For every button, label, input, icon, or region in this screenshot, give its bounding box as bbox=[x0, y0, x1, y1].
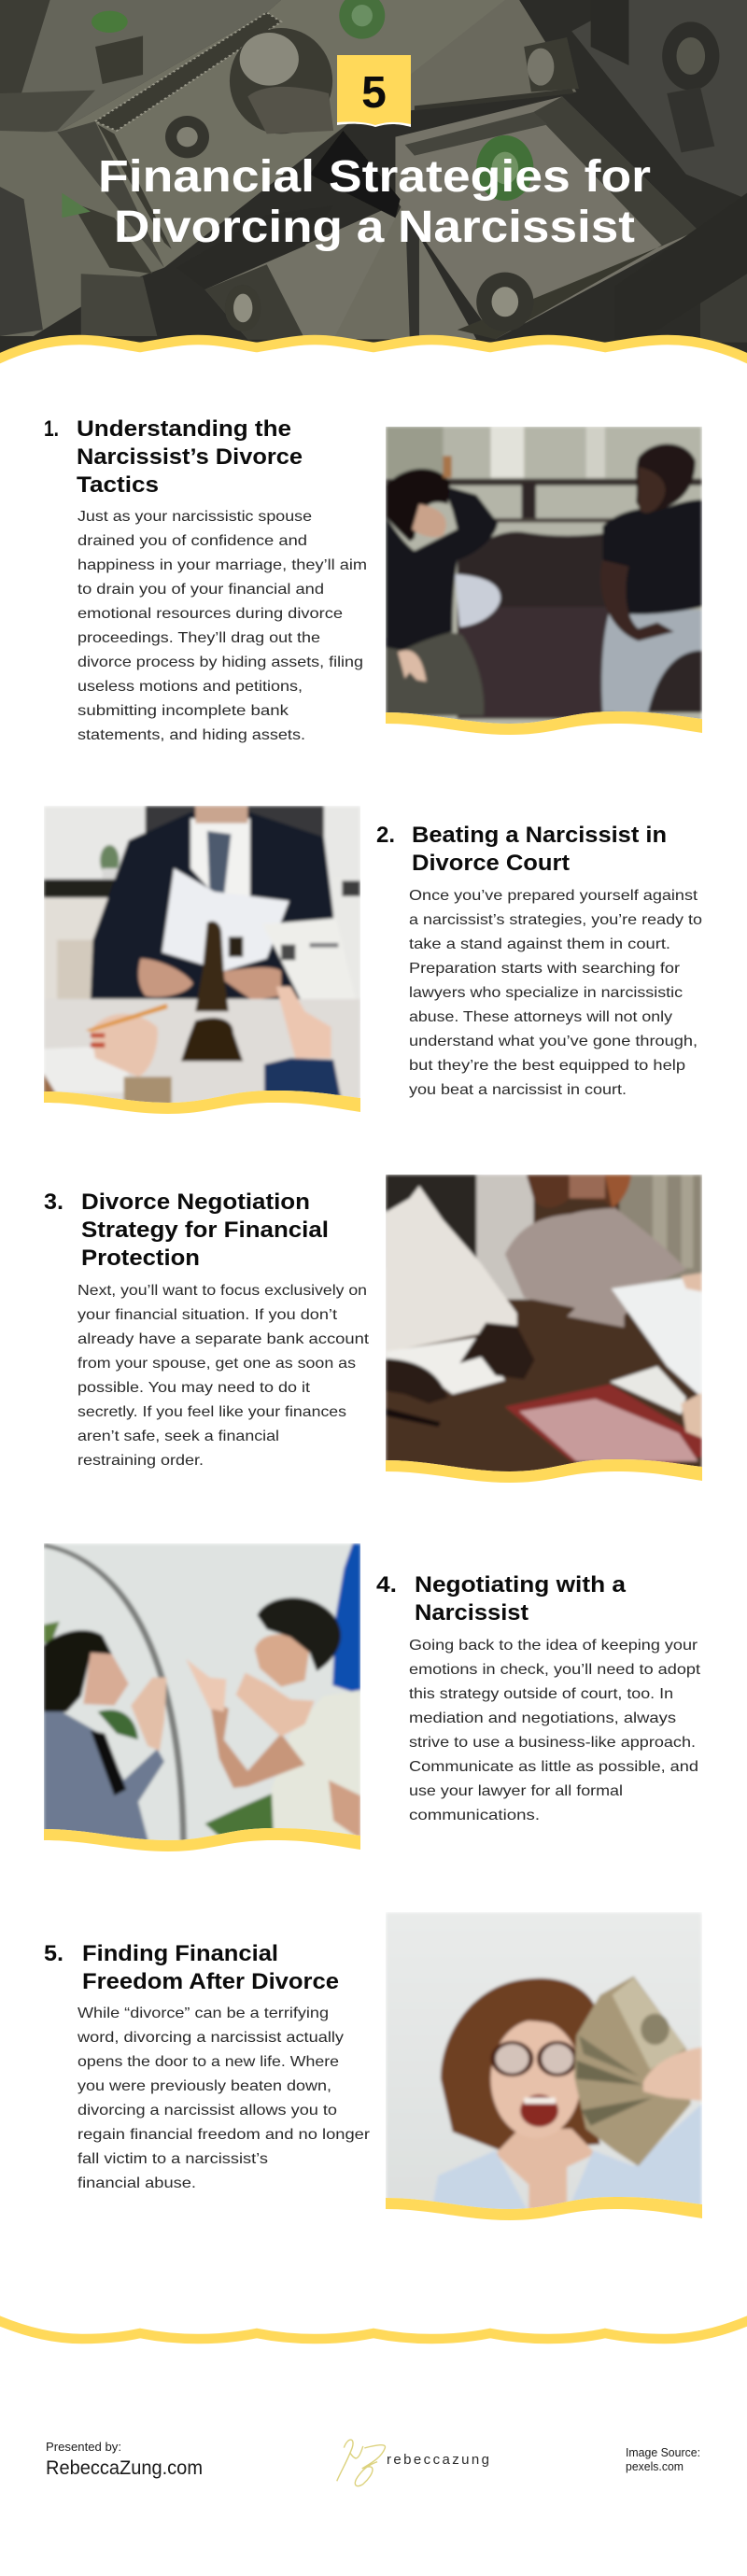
text block: section 5 body: divorcing a narcissist allows you to bbox=[78, 2103, 337, 2119]
heading: section 3: Protection bbox=[81, 1246, 200, 1271]
text block: section 3 body: restraining order. bbox=[78, 1453, 204, 1469]
badge with number 5 bbox=[337, 55, 411, 127]
text block: section 4 body: strive to use a business-like approach. bbox=[409, 1735, 696, 1751]
text block: section 1 body: happiness in your marriage, they’ll aim bbox=[78, 557, 367, 573]
text block: section 5 body: While “divorce” can be a terrifying bbox=[78, 2006, 329, 2021]
text block: section 2 body: abuse. These attorneys will not only bbox=[409, 1009, 672, 1025]
text block: section 4 body: emotions in check, you’ll need to adopt bbox=[409, 1662, 701, 1678]
photo: couple arguing on a sofa bbox=[386, 427, 702, 738]
panel: section 1 bbox=[44, 416, 702, 743]
yellow wave under photo 4 bbox=[44, 1828, 360, 1851]
text block: section 3 body: from your spouse, get one as soon as bbox=[78, 1356, 356, 1372]
yellow wave under photo 2 bbox=[44, 1091, 360, 1114]
panel: section 5 bbox=[44, 1912, 702, 2224]
text block: section 1 body: divorce process by hiding assets, filing bbox=[78, 655, 363, 670]
text block: section 3 body bbox=[78, 1283, 370, 1469]
photo: couple signing papers at a table bbox=[386, 1175, 702, 1486]
text block: section 4 body: mediation and negotiations, always bbox=[409, 1710, 676, 1726]
text block: section 1 body: submitting incomplete bank bbox=[78, 703, 289, 719]
text block: section 2 body: Preparation starts with searching for bbox=[409, 961, 681, 977]
heading: section 1: Tactics bbox=[77, 472, 159, 498]
text block: section 5 body: opens the door to a new life. Where bbox=[78, 2054, 339, 2070]
yellow wave under photo 1 bbox=[386, 711, 702, 735]
text block: section 2 body: understand what you’ve gone through, bbox=[409, 1034, 698, 1049]
hero panel: dollar bills background bbox=[0, 0, 747, 373]
text block: section 3 body: aren’t safe, seek a financial bbox=[78, 1429, 279, 1444]
heading: section 4 bbox=[376, 1572, 627, 1626]
yellow wave under photo 3 bbox=[386, 1459, 702, 1483]
heading: section 5: Freedom After Divorce bbox=[82, 1969, 339, 1994]
white area below the hero bbox=[0, 340, 747, 392]
text block: section 3 body: Next, you’ll want to focus exclusively on bbox=[78, 1283, 367, 1299]
footer: image source: Image Source: bbox=[626, 2445, 700, 2459]
heading: section 3: Strategy for Financial bbox=[81, 1218, 329, 1243]
panel: section 4 bbox=[44, 1543, 701, 1855]
footer: image source bbox=[626, 2445, 700, 2473]
heading: section 2: Beating a Narcissist in bbox=[412, 823, 667, 848]
text block: section 5 body: word, divorcing a narcissist actually bbox=[77, 2030, 344, 2046]
photo: couple gesturing at each other bbox=[44, 1543, 360, 1855]
text block: section 5 body: regain financial freedom and no longer bbox=[78, 2127, 371, 2143]
text block: section 1 body: useless motions and petitions, bbox=[78, 679, 303, 695]
text block: section 4 body bbox=[409, 1638, 701, 1823]
text block: section 1 body: proceedings. They’ll drag out the bbox=[78, 630, 320, 646]
text block: section 5 body bbox=[77, 2006, 371, 2191]
footer: presented by: RebeccaZung.com bbox=[46, 2457, 203, 2479]
text block: section 4 body: use your lawyer for all formal bbox=[409, 1783, 623, 1799]
text block: section 2 body: you beat a narcissist in court. bbox=[409, 1082, 627, 1098]
footer: image source: pexels.com bbox=[626, 2459, 684, 2473]
panel: section 3 bbox=[44, 1175, 702, 1486]
heading: section 5: Finding Financial bbox=[82, 1941, 278, 1966]
footer: logo bbox=[337, 2440, 489, 2486]
text block: section 4 body: Going back to the idea of keeping your bbox=[409, 1638, 698, 1654]
text block: section 4 body: Communicate as little as possible, and bbox=[409, 1759, 698, 1775]
text block: section 4 body: communications. bbox=[409, 1808, 540, 1823]
heading: section 4: 4. bbox=[376, 1572, 397, 1598]
heading: section 3: 3. bbox=[44, 1189, 63, 1215]
title bbox=[98, 152, 651, 252]
footer: presented by bbox=[46, 2440, 203, 2479]
heading: section 5: 5. bbox=[44, 1941, 63, 1966]
heading: section 3 bbox=[44, 1189, 329, 1271]
heading: section 1: Understanding the bbox=[77, 416, 291, 442]
heading: section 2: Divorce Court bbox=[412, 851, 570, 876]
heading: section 2: 2. bbox=[376, 823, 395, 848]
text block: section 5 body: fall victim to a narcissist’s bbox=[78, 2151, 268, 2167]
heading: section 5 bbox=[44, 1941, 339, 1994]
text block: section 3 body: your financial situation. If you don’t bbox=[78, 1307, 338, 1323]
hero wave border bbox=[0, 340, 747, 360]
text block: section 1 body: drained you of confidence and bbox=[78, 533, 307, 549]
text block: section 2 body bbox=[409, 888, 702, 1098]
footer: presented by: Presented by: bbox=[46, 2440, 121, 2454]
title: Financial Strategies for bbox=[98, 152, 651, 202]
text block: section 2 body: a narcissist’s strategies, you’re ready to bbox=[409, 912, 702, 928]
text block: section 1 body: Just as your narcissistic spouse bbox=[78, 509, 312, 525]
yellow wave under photo 5 bbox=[386, 2197, 702, 2220]
text block: section 2 body: lawyers who specialize in narcissistic bbox=[409, 985, 683, 1001]
heading: section 3: Divorce Negotiation bbox=[81, 1189, 310, 1215]
text block: section 2 body: take a stand against them in court. bbox=[409, 936, 670, 952]
photo: excited woman holding a fan of cash bbox=[386, 1912, 702, 2224]
text block: section 1 body bbox=[78, 509, 367, 743]
text block: section 5 body: you were previously beaten down, bbox=[78, 2078, 331, 2094]
text block: section 1 body: statements, and hiding assets. bbox=[78, 727, 305, 743]
text block: section 3 body: secretly. If you feel like your finances bbox=[78, 1404, 346, 1420]
icon: signature monogram bbox=[337, 2440, 385, 2486]
footer: logo: rebeccazung bbox=[387, 2452, 489, 2468]
heading: section 2 bbox=[376, 823, 667, 876]
panel: section 2 bbox=[44, 806, 702, 1118]
badge with number 5: 5 bbox=[361, 68, 387, 118]
text block: section 2 body: but they’re the best equipped to help bbox=[409, 1058, 685, 1074]
heading: section 1: Narcissist’s Divorce bbox=[77, 444, 303, 470]
footer wave divider bbox=[0, 2319, 747, 2339]
text block: section 2 body: Once you’ve prepared yourself against bbox=[409, 888, 698, 904]
text block: section 1 body: to drain you of your financial and bbox=[78, 582, 324, 598]
photo: lawyer and scales statue bbox=[44, 806, 360, 1118]
text block: section 4 body: this strategy outside of court, too. In bbox=[409, 1686, 673, 1702]
heading: section 1 bbox=[44, 416, 303, 498]
heading: section 4: Negotiating with a bbox=[415, 1572, 627, 1598]
title: Divorcing a Narcissist bbox=[114, 203, 635, 252]
text block: section 1 body: emotional resources during divorce bbox=[78, 606, 343, 622]
heading: section 4: Narcissist bbox=[415, 1600, 529, 1626]
text block: section 3 body: already have a separate bank account bbox=[78, 1331, 370, 1347]
text block: section 3 body: possible. You may need to do it bbox=[78, 1380, 311, 1396]
heading: section 1: 1. bbox=[44, 416, 59, 442]
text block: section 5 body: financial abuse. bbox=[78, 2175, 196, 2191]
